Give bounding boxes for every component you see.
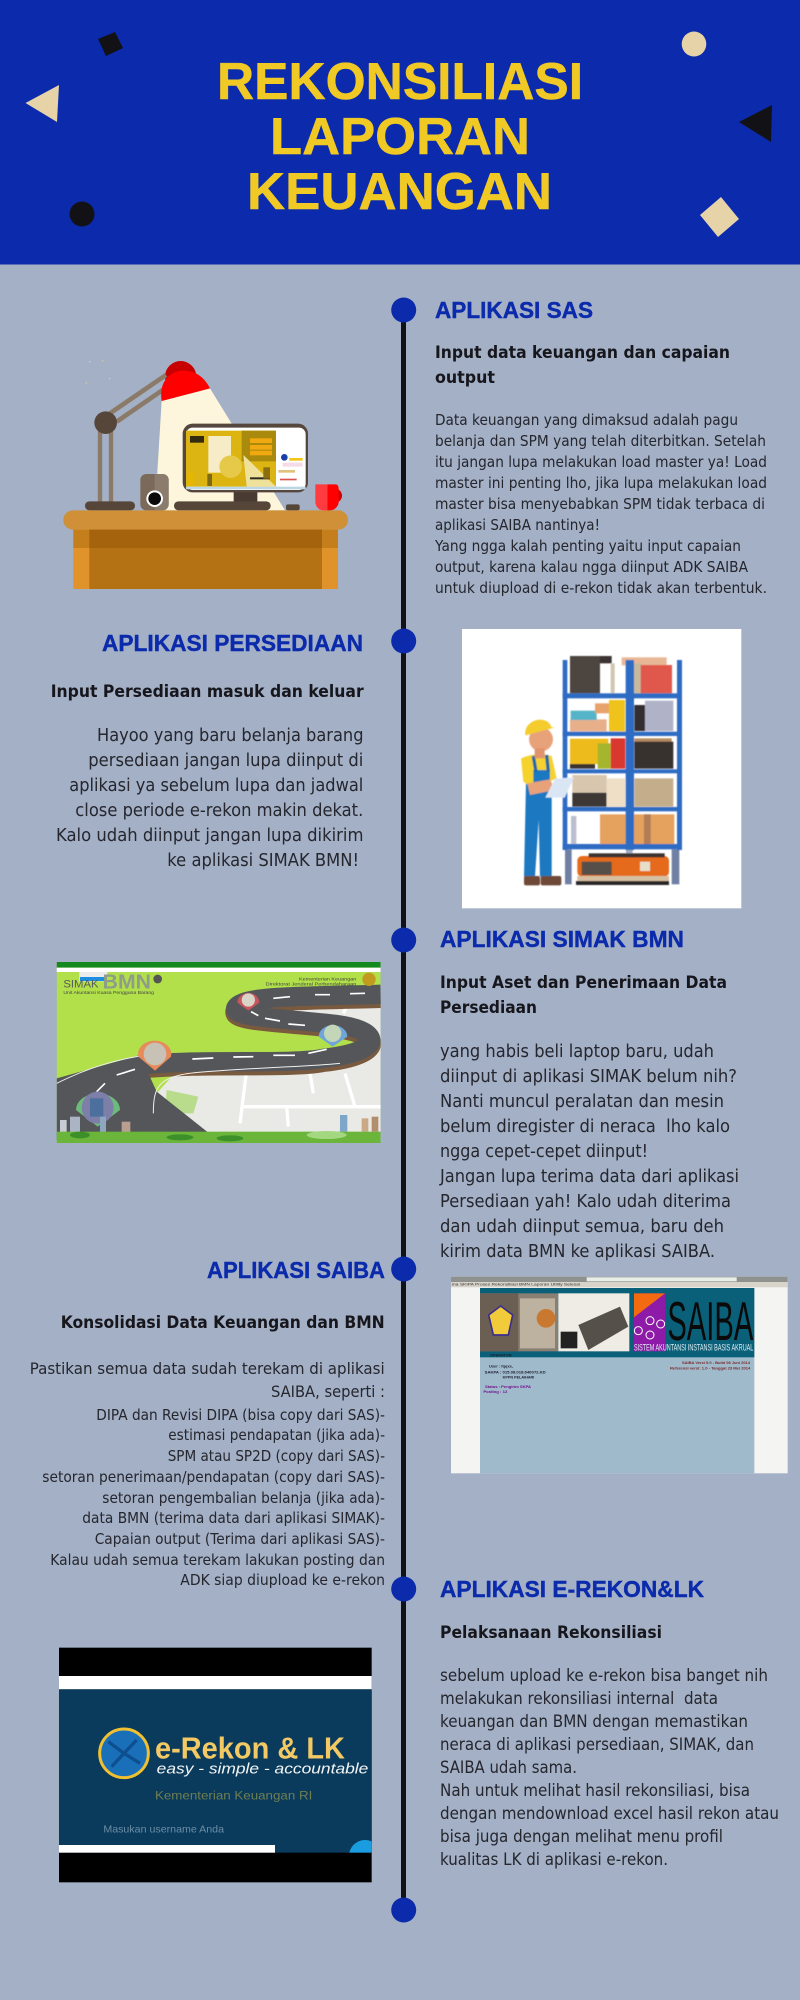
screenshot: SIMAK BMN application: Direktorat Jenderal Perbendaharaan bbox=[266, 982, 357, 987]
section: Aplikasi SIMAK BMN text: Input Aset dan Penerimaan Data bbox=[440, 973, 727, 993]
screenshot: SAIBA application: SAIBA Versi 5.0 - Build 06 Juni 2014 bbox=[682, 1361, 751, 1365]
screenshot: SIMAK BMN application: BMN bbox=[103, 971, 151, 994]
section: Aplikasi Persediaan text: persediaan jangan lupa diinput di bbox=[88, 750, 363, 771]
section: Aplikasi Persediaan text: ke aplikasi SIMAK BMN! bbox=[167, 850, 359, 871]
section: Aplikasi SAIBA text: DIPA dan Revisi DIPA (bisa copy dari SAS)- bbox=[96, 1406, 385, 1424]
section: Aplikasi SIMAK BMN text: Jangan lupa terima data dari aplikasi bbox=[439, 1166, 739, 1187]
section: Aplikasi Persediaan text bbox=[51, 630, 364, 871]
screenshot: e-Rekon & LK login: easy - simple - accountable bbox=[157, 1761, 368, 1777]
title bbox=[217, 53, 583, 221]
screenshot: SAIBA application: Status : Pengirim SKPA bbox=[485, 1385, 531, 1389]
section: Aplikasi SAS text bbox=[434, 297, 767, 597]
section: Aplikasi SIMAK BMN text: Nanti muncul peralatan dan mesin bbox=[440, 1091, 724, 1112]
section: Aplikasi SIMAK BMN text: dan udah diinput semua, baru deh bbox=[440, 1216, 724, 1237]
decorative confetti shapes bbox=[26, 32, 772, 237]
section: Aplikasi SIMAK BMN text bbox=[439, 926, 739, 1262]
section: Aplikasi SAS text: output bbox=[435, 368, 495, 388]
section: Aplikasi SAS text: master bisa menyebabkan SPM tidak terbaca di bbox=[435, 495, 765, 513]
section: Aplikasi e-Rekon&LK text: keuangan dan BMN dengan memastikan bbox=[440, 1712, 748, 1731]
section: Aplikasi Persediaan text: Input Persediaan masuk dan keluar bbox=[51, 682, 364, 702]
section: Aplikasi SAS text: Data keuangan yang dimaksud adalah pagu bbox=[435, 411, 738, 429]
section: Aplikasi Persediaan text: Kalo udah diinput jangan lupa dikirim bbox=[56, 825, 364, 846]
screenshot: SAIBA application: ma SKIPA Proses Rekonsiliasi BMN Laporan Utility Selesai bbox=[452, 1282, 580, 1287]
section: Aplikasi SAS text: belanja dan SPM yang telah diterbitkan. Setelah bbox=[435, 432, 766, 450]
section: Aplikasi e-Rekon&LK text: APLIKASI E-REKON&LK bbox=[440, 1576, 704, 1602]
section: Aplikasi SAIBA text: setoran penerimaan/pendapatan (copy dari SAS)- bbox=[42, 1468, 385, 1486]
screenshot: SIMAK BMN application: Unit Akuntansi Kuasa Pengguna Barang bbox=[63, 990, 155, 995]
screenshot: SAIBA application: User : fqqxs, bbox=[489, 1365, 513, 1369]
section: Aplikasi SAIBA text: APLIKASI SAIBA bbox=[207, 1257, 385, 1283]
section: Aplikasi e-Rekon&LK text: melakukan rekonsiliasi internal data bbox=[440, 1689, 718, 1708]
timeline bbox=[391, 298, 416, 1922]
screenshot: SAIBA application: KPPN PELAIHARI bbox=[503, 1376, 534, 1380]
section: Aplikasi SIMAK BMN text: diinput di aplikasi SIMAK belum nih? bbox=[440, 1066, 737, 1087]
section: Aplikasi SAS text: Yang ngga kalah penting yaitu input capaian bbox=[434, 537, 741, 555]
section: Aplikasi e-Rekon&LK text: neraca di aplikasi persediaan, SIMAK, dan bbox=[440, 1735, 754, 1754]
section: Aplikasi SIMAK BMN text: kirim data BMN ke aplikasi SAIBA. bbox=[440, 1241, 715, 1262]
section: Aplikasi SAIBA text: SPM atau SP2D (copy dari SAS)- bbox=[168, 1447, 385, 1465]
screenshot: SAIBA application: OPERATOR bbox=[490, 1354, 512, 1358]
section: Aplikasi Persediaan text: close periode e-rekon makin dekat. bbox=[75, 800, 363, 821]
section: Aplikasi Persediaan text: Hayoo yang baru belanja barang bbox=[97, 725, 364, 746]
section: Aplikasi SIMAK BMN text: belum diregister di neraca lho kalo bbox=[440, 1116, 730, 1137]
screenshot: SIMAK BMN application bbox=[57, 962, 381, 1143]
section: Aplikasi SAS text: Input data keuangan dan capaian bbox=[435, 343, 730, 363]
section: Aplikasi SAIBA text: estimasi pendapatan (jika ada)- bbox=[168, 1426, 385, 1444]
screenshot: SAIBA application bbox=[451, 1277, 788, 1473]
title: LAPORAN bbox=[270, 108, 530, 166]
section: Aplikasi SAIBA text bbox=[30, 1257, 385, 1589]
section: Aplikasi Persediaan text: APLIKASI PERSEDIAAN bbox=[102, 630, 363, 656]
screenshot: SAIBA application: Referensi versi: 1.0 - Tanggal 23 Mei 2014 bbox=[670, 1367, 751, 1371]
section: Aplikasi SAIBA text: Capaian output (Terima dari aplikasi SAS)- bbox=[95, 1530, 385, 1548]
screenshot: e-Rekon & LK login: e-Rekon & LK bbox=[155, 1731, 345, 1765]
section: Aplikasi e-Rekon&LK text bbox=[440, 1576, 779, 1869]
section: Aplikasi Persediaan text: aplikasi ya sebelum lupa dan jadwal bbox=[69, 775, 363, 796]
section: Aplikasi SAS text: output, karena kalau ngga diinput ADK SAIBA bbox=[435, 558, 748, 576]
section: Aplikasi SAS text: master ini penting lho, jika lupa melakukan load bbox=[435, 474, 767, 492]
section: Aplikasi e-Rekon&LK text: Nah untuk melihat hasil rekonsiliasi, bisa bbox=[440, 1781, 750, 1800]
section: Aplikasi SAIBA text: ADK siap diupload ke e-rekon bbox=[180, 1571, 385, 1589]
section: Aplikasi SAIBA text: SAIBA, seperti : bbox=[271, 1382, 385, 1401]
section: Aplikasi SAIBA text: Konsolidasi Data Keuangan dan BMN bbox=[61, 1313, 385, 1333]
header band bbox=[0, 0, 800, 264]
section: Aplikasi SAS text: untuk diupload di e-rekon tidak akan terbentuk. bbox=[435, 579, 767, 597]
section: Aplikasi SIMAK BMN text: ngga cepet-cepet diinput! bbox=[440, 1141, 648, 1162]
section: Aplikasi e-Rekon&LK text: bisa juga dengan melihat menu profil bbox=[440, 1827, 723, 1846]
section: Aplikasi SIMAK BMN text: APLIKASI SIMAK BMN bbox=[440, 926, 684, 952]
section: Aplikasi e-Rekon&LK text: sebelum upload ke e-rekon bisa banget nih bbox=[440, 1666, 768, 1685]
section: Aplikasi SAIBA text: Pastikan semua data sudah terekam di aplikasi bbox=[30, 1359, 385, 1378]
section: Aplikasi SIMAK BMN text: Persediaan bbox=[440, 998, 537, 1018]
section: Aplikasi SAS text: aplikasi SAIBA nantinya! bbox=[435, 516, 600, 534]
section: Aplikasi e-Rekon&LK text: SAIBA udah sama. bbox=[440, 1758, 577, 1777]
section: Aplikasi SAIBA text: setoran pengembalian belanja (jika ada)- bbox=[102, 1489, 385, 1507]
section: Aplikasi SIMAK BMN text: yang habis beli laptop baru, udah bbox=[440, 1041, 714, 1062]
screenshot: e-Rekon & LK login: Masukan username Anda bbox=[103, 1825, 225, 1836]
section: Aplikasi SAS text: APLIKASI SAS bbox=[435, 297, 593, 323]
section: Aplikasi SIMAK BMN text: Persediaan yah! Kalo udah diterima bbox=[440, 1191, 731, 1212]
screenshot: SIMAK BMN application: SIMAK bbox=[63, 978, 99, 990]
illustration: warehouse worker with shelves bbox=[462, 629, 741, 908]
title: REKONSILIASI bbox=[217, 53, 583, 111]
section: Aplikasi e-Rekon&LK text: kualitas LK di aplikasi e-rekon. bbox=[440, 1850, 668, 1869]
section: Aplikasi SAIBA text: Kalau udah semua terekam lakukan posting dan bbox=[50, 1551, 385, 1569]
section: Aplikasi SAIBA text: data BMN (terima data dari aplikasi SIMAK)- bbox=[82, 1509, 385, 1527]
screenshot: SAIBA application: Posting : 12 bbox=[483, 1390, 507, 1394]
title: KEUANGAN bbox=[247, 163, 552, 221]
screenshot: e-Rekon & LK login bbox=[59, 1648, 381, 1882]
screenshot: SIMAK BMN application: Kementerian Keuangan bbox=[299, 977, 357, 982]
illustration: desk with lamp and monitor bbox=[63, 360, 348, 589]
section: Aplikasi e-Rekon&LK text: Pelaksanaan Rekonsiliasi bbox=[440, 1623, 662, 1643]
screenshot: SAIBA application: SAKPA : 015.08.018.640072.KD bbox=[485, 1371, 546, 1375]
screenshot: e-Rekon & LK login: Kementerian Keuangan RI bbox=[155, 1788, 312, 1802]
section: Aplikasi SAS text: itu jangan lupa melakukan load master ya! Load bbox=[435, 453, 767, 471]
